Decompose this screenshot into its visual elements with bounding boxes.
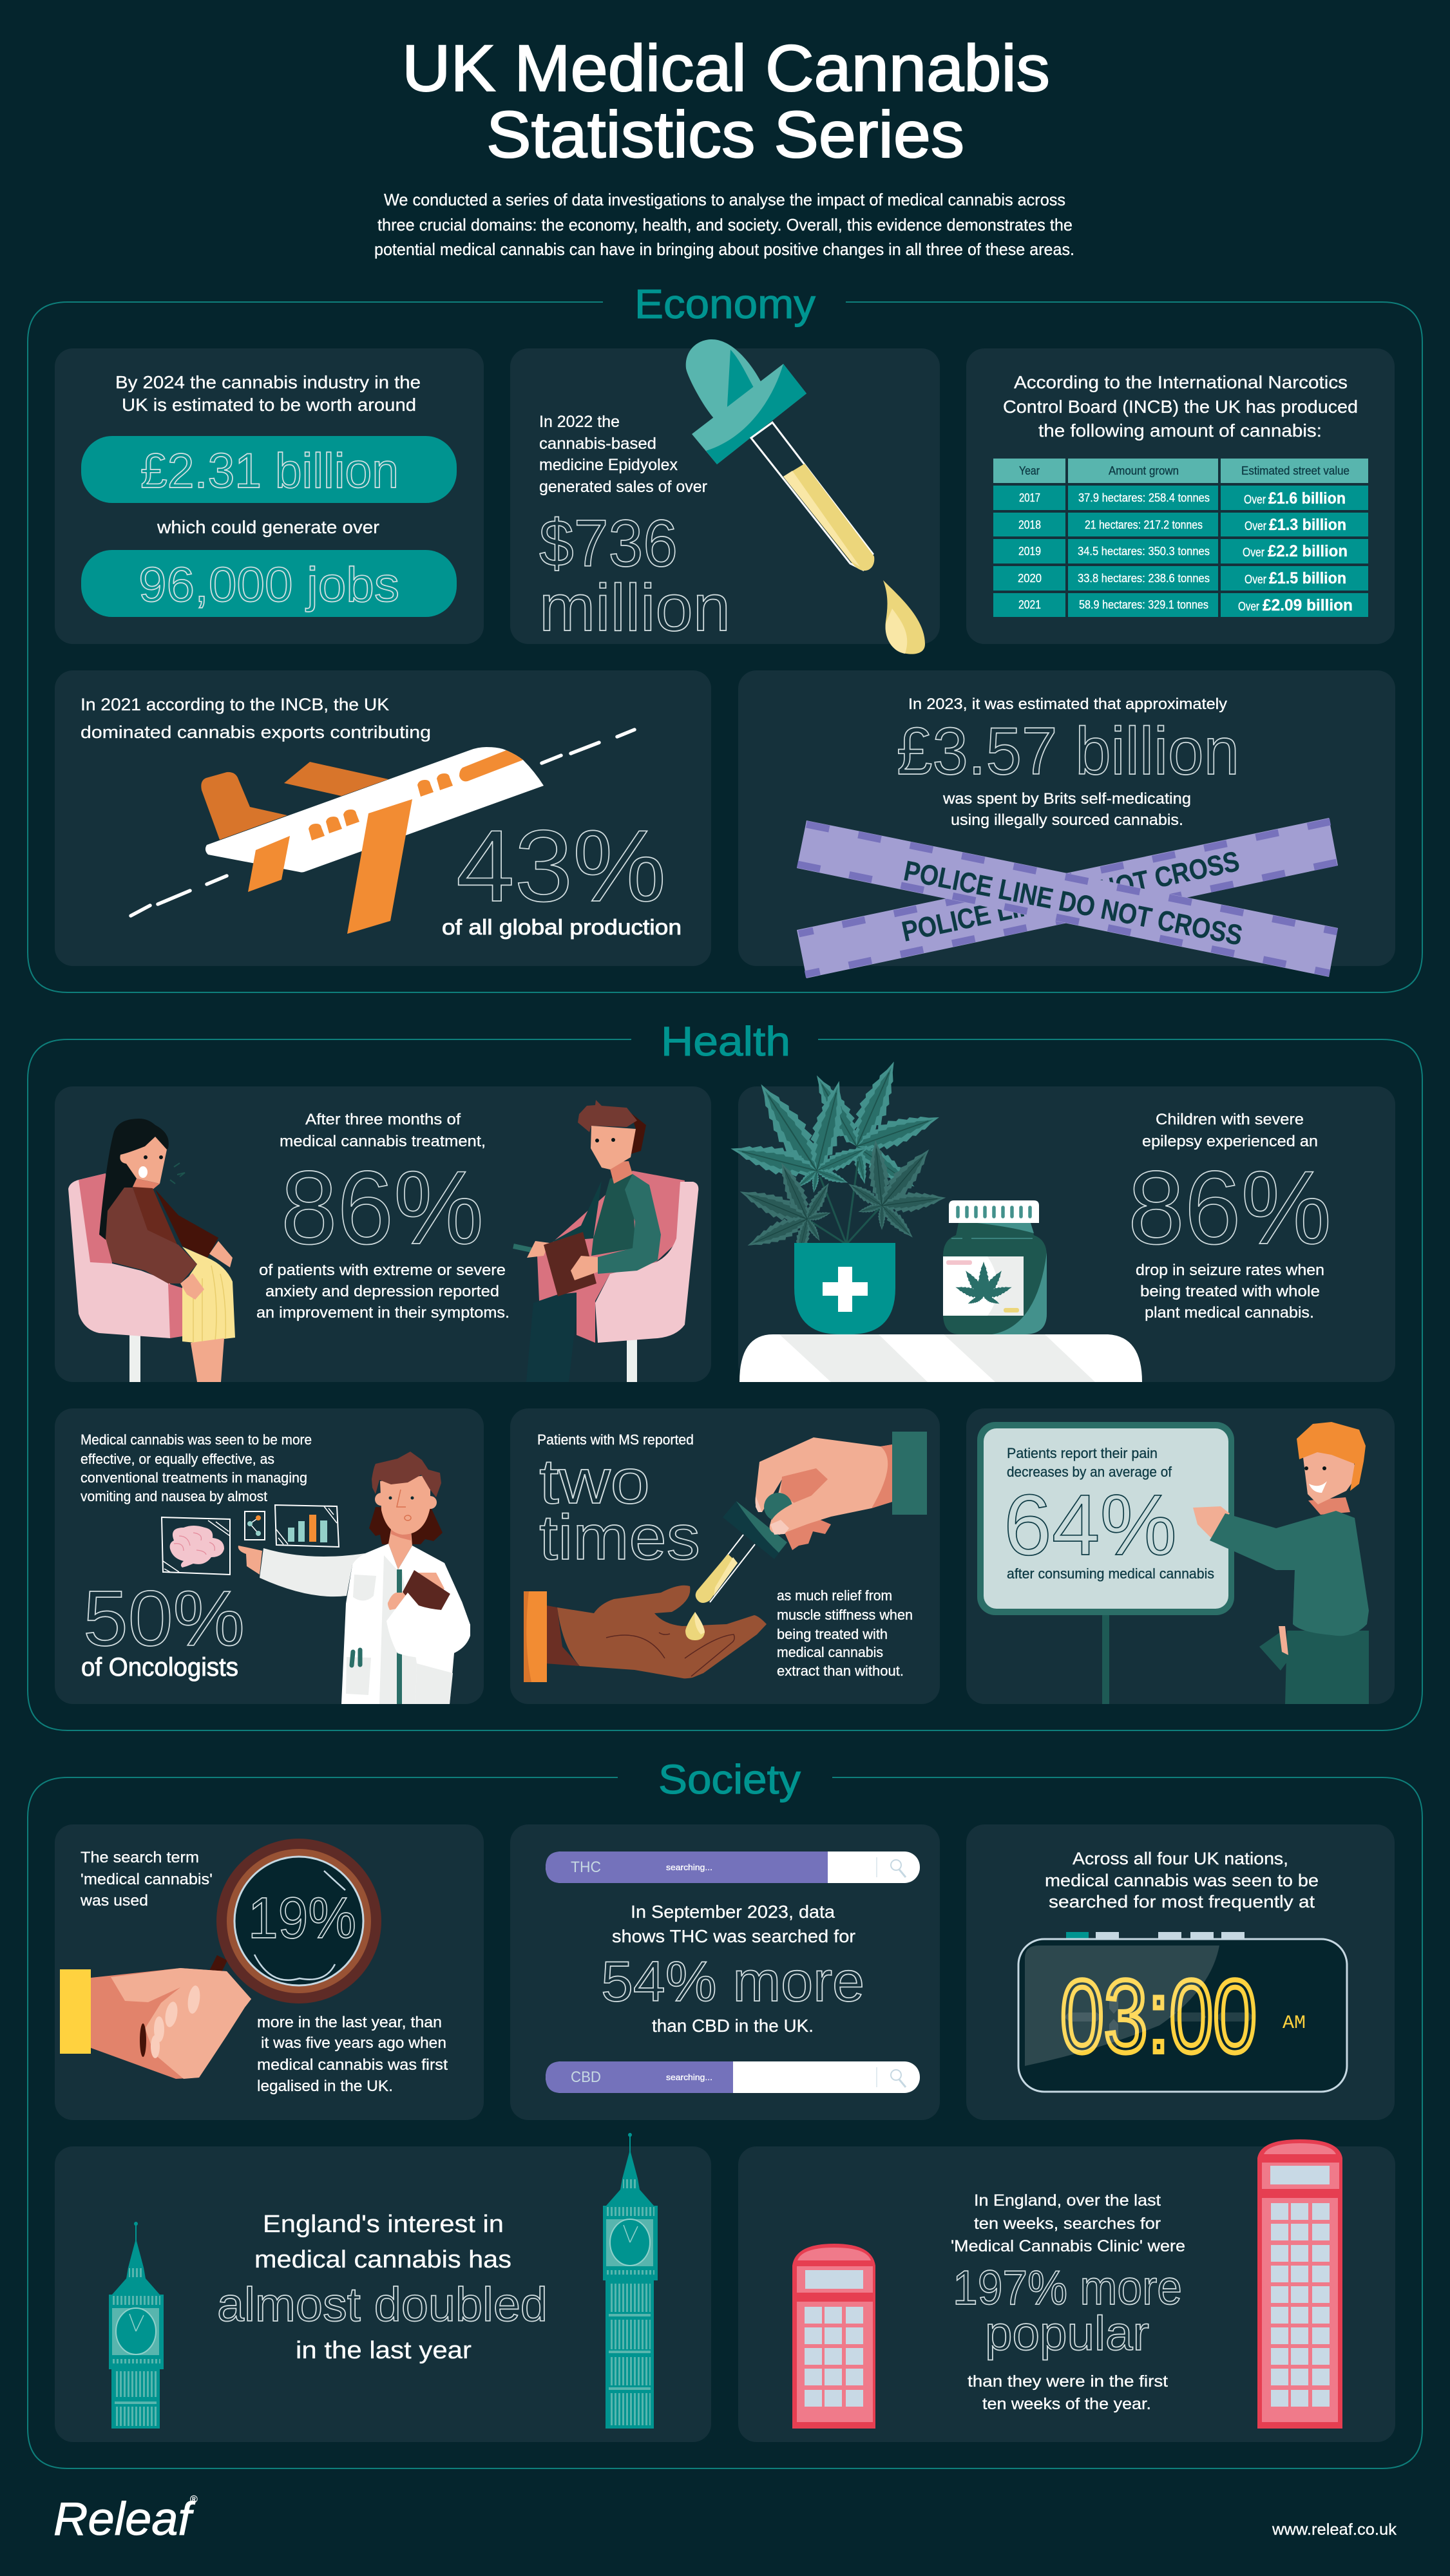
panel: epidyolex: $736 [539, 506, 678, 580]
police tape: POLICE LINE DO NOT CROSS [901, 855, 1245, 952]
panel: search term: legalised in the UK. [257, 2078, 393, 2095]
panel: multiple sclerosis: times [539, 1502, 700, 1573]
table with jar and plant [727, 1056, 1142, 1382]
icon: small Big Ben [109, 2222, 164, 2429]
section frame: society [28, 1777, 1422, 2468]
illustration: hand with dropper [696, 1432, 927, 1603]
panel: THC vs CBD [510, 1824, 940, 2120]
board [977, 1422, 1234, 1704]
panel: search term [55, 1824, 484, 2120]
table: 33.8 hectares: 238.6 tonnes [1078, 572, 1210, 585]
search bar: CBD: searching... [666, 2072, 712, 2082]
icon: dropper [686, 339, 925, 654]
title [402, 32, 1050, 171]
panel: self-medicating: £3.57 billion [897, 714, 1239, 789]
police tape: POLICE LINE DO NOT CROSS [899, 846, 1242, 948]
panel: epilepsy: drop in seizure rates when [1136, 1262, 1324, 1279]
panel: search term: it was five years ago when [261, 2034, 446, 2052]
table: 2018 [1018, 518, 1041, 531]
table: Year [1019, 464, 1040, 477]
icon: large phone box [1257, 2139, 1342, 2429]
panel: exports: 43% [456, 810, 666, 923]
panel: oncologists: 50% [83, 1575, 245, 1662]
panel: search term: was used [80, 1892, 148, 1909]
panel: multiple sclerosis: medical cannabis [777, 1644, 883, 1660]
panel: THC vs CBD: than CBD in the UK. [652, 2016, 814, 2036]
heading: economy: Economy [634, 281, 816, 327]
logo: Releaf [53, 2494, 196, 2545]
table: Over [1244, 493, 1266, 507]
search bar: CBD: CBD [571, 2069, 601, 2086]
search bar: THC: searching... [666, 1862, 712, 1872]
panel: self-medicating: using illegally sourced cannabis. [951, 811, 1183, 829]
icon: large Big Ben [603, 2133, 658, 2429]
illustration: cupped hand [524, 1586, 767, 1682]
board: decreases by an average of [1007, 1464, 1172, 1480]
panel: epidyolex: million [539, 571, 730, 645]
panel: epidyolex: cannabis-based [539, 435, 656, 453]
intro text: three crucial domains: the economy, health, and society. Overall, this evidence demonstrates the [377, 215, 1073, 234]
panel: epidyolex: medicine Epidyolex [539, 456, 678, 474]
table: Over [1245, 520, 1267, 533]
panel: multiple sclerosis: extract than without. [777, 1663, 904, 1679]
panel: self-medicating: In 2023, it was estimated that approximately [908, 696, 1227, 713]
floating brain and chart panels [162, 1505, 339, 1575]
panel: oncologists: Medical cannabis was seen to be more [81, 1432, 312, 1448]
search bar: THC [546, 1852, 920, 1883]
panel: multiple sclerosis: as much relief from [777, 1587, 892, 1604]
panel: industry worth: which could generate over [157, 517, 379, 537]
table: £1.5 billion [1269, 569, 1346, 587]
digital clock: 03:00 [1060, 1958, 1257, 2074]
panel: multiple sclerosis [510, 1408, 940, 1704]
panel: clinic searches: than they were in the first [968, 2372, 1168, 2391]
panel: industry worth [55, 348, 484, 644]
icon: plant [727, 1056, 947, 1262]
pill: 2.31 billion [81, 436, 457, 503]
panel: self-medicating: was spent by Brits self-medicating [942, 790, 1191, 808]
table: Over [1243, 546, 1265, 560]
illustration: oncologist [238, 1452, 470, 1704]
search bar: THC: THC [571, 1859, 601, 1876]
panel: cannabis production table: the following amount of cannabis: [1038, 421, 1322, 440]
panel: searched at 3am: medical cannabis was seen to be [1045, 1871, 1319, 1890]
panel: exports: of all global production [442, 915, 682, 939]
panel: search term: more in the last year, than [257, 2014, 442, 2031]
table [993, 459, 1368, 617]
panel: England interest: almost doubled [217, 2278, 548, 2331]
table: 58.9 hectares: 329.1 tonnes [1079, 598, 1208, 611]
panel: THC vs CBD: shows THC was searched for [612, 1926, 855, 1946]
panel: England interest: medical cannabis has [254, 2246, 511, 2273]
panel: multiple sclerosis: muscle stiffness when [777, 1607, 913, 1623]
panel: clinic searches: popular [985, 2306, 1149, 2360]
pill: jobs [81, 550, 457, 617]
panel: searched at 3am: searched for most frequently at [1049, 1892, 1315, 1911]
pill: 2.31 billion: £2.31 billion [140, 444, 399, 498]
panel: epilepsy: being treated with whole [1140, 1283, 1320, 1300]
table: Estimated street value [1241, 464, 1350, 477]
intro text: We conducted a series of data investigations to analyse the impact of medical cannabis across [384, 190, 1065, 209]
panel: anxiety and depression: medical cannabis treatment, [280, 1133, 486, 1150]
board: after consuming medical cannabis [1007, 1566, 1214, 1582]
digital clock [1018, 1932, 1347, 2092]
panel: oncologists [55, 1408, 484, 1704]
section frame: economy [28, 302, 1422, 992]
digital clock: AM [1283, 2012, 1306, 2034]
panel: search term: The search term [81, 1849, 199, 1866]
panel: oncologists: conventional treatments in managing [81, 1470, 307, 1486]
table: Over [1245, 573, 1267, 587]
panel: clinic searches: 'Medical Cannabis Clinic' were [951, 2237, 1185, 2255]
table: 2021 [1018, 598, 1041, 611]
table: £2.09 billion [1263, 596, 1353, 614]
table: £1.3 billion [1269, 516, 1346, 534]
panel: anxiety and depression: of patients with extreme or severe [259, 1262, 506, 1279]
panel: epilepsy: 86% [1128, 1150, 1331, 1266]
panel: multiple sclerosis: being treated with [777, 1626, 888, 1642]
pill: jobs: 96,000 jobs [138, 558, 399, 612]
intro text: potential medical cannabis can have in bringing about positive changes in all three of these areas. [374, 240, 1074, 259]
board: 64% [1004, 1477, 1177, 1573]
panel: oncologists: effective, or equally effective, as [81, 1451, 274, 1467]
panel: anxiety and depression [55, 1086, 711, 1382]
panel: searched at 3am [966, 1824, 1395, 2120]
panel: England interest: England's interest in [263, 2211, 504, 2238]
panel: clinic searches: ten weeks, searches for [974, 2215, 1161, 2233]
panel: search term: medical cannabis was first [257, 2056, 448, 2074]
police tape [797, 818, 1338, 978]
panel: self-medicating [738, 670, 1395, 978]
board: Patients report their pain [1007, 1445, 1158, 1461]
logo: ® [190, 2494, 198, 2505]
panel: industry worth: UK is estimated to be worth around [122, 395, 416, 415]
icon: magnifier and hand: 19% [248, 1886, 356, 1951]
panel: searched at 3am: Across all four UK nations, [1073, 1849, 1288, 1868]
panel: oncologists: of Oncologists [81, 1653, 238, 1681]
search bar: CBD [546, 2061, 920, 2093]
icon: magnifier and hand [60, 1839, 381, 2079]
panel: clinic searches: In England, over the last [974, 2192, 1161, 2210]
panel: cannabis production table [966, 348, 1395, 644]
panel: THC vs CBD: In September 2023, data [631, 1902, 835, 1922]
panel: multiple sclerosis: two [539, 1446, 650, 1517]
title: Statistics Series [486, 98, 964, 171]
panel: anxiety and depression: 86% [281, 1150, 484, 1266]
table: 21 hectares: 217.2 tonnes [1085, 518, 1203, 531]
panel: industry worth: By 2024 the cannabis industry in the [115, 372, 421, 392]
panel: clinic searches: ten weeks of the year. [982, 2395, 1151, 2413]
panel: cannabis production table: Control Board (INCB) the UK has produced [1003, 397, 1358, 417]
icon: aeroplane [131, 730, 634, 934]
icon: medicine jar [943, 1200, 1047, 1334]
panel: exports: dominated cannabis exports contributing [81, 723, 431, 742]
panel: epilepsy [727, 1056, 1395, 1382]
table: 2017 [1019, 491, 1040, 504]
section frame: health [28, 1039, 1422, 1730]
panel: epilepsy: epilepsy experienced an [1142, 1133, 1318, 1150]
panel: clinic searches [738, 2139, 1395, 2442]
panel: exports [55, 670, 711, 966]
panel: pain board [966, 1408, 1395, 1704]
heading: health: Health [661, 1018, 790, 1065]
panel: oncologists: vomiting and nausea by almost [81, 1488, 267, 1504]
table: Amount grown [1109, 464, 1179, 477]
panel: multiple sclerosis: Patients with MS reported [537, 1432, 694, 1448]
icon: small phone box [792, 2244, 875, 2429]
table: 2019 [1018, 545, 1041, 558]
panel: epidyolex: generated sales of over [539, 478, 707, 496]
table: £1.6 billion [1268, 489, 1346, 507]
icon: pot [794, 1243, 895, 1334]
intro text [374, 190, 1074, 259]
table: 2020 [1018, 572, 1042, 585]
panel: THC vs CBD: 54% more [601, 1949, 864, 2013]
panel: epidyolex: In 2022 the [539, 413, 620, 431]
heading: society: Society [658, 1756, 801, 1803]
table: 34.5 hectares: 350.3 tonnes [1078, 545, 1210, 558]
panel: England interest [55, 2133, 711, 2442]
panel: epilepsy: Children with severe [1156, 1111, 1304, 1128]
table: 37.9 hectares: 258.4 tonnes [1078, 491, 1210, 504]
illustration: doctor in chair [513, 1100, 698, 1382]
panel: anxiety and depression: an improvement in their symptoms. [256, 1304, 510, 1321]
illustration: man pointing [1193, 1422, 1369, 1704]
illustration: patient in chair [68, 1119, 235, 1382]
table: Over [1238, 600, 1260, 614]
panel: clinic searches: 197% more [953, 2260, 1182, 2315]
panel: exports: In 2021 according to the INCB, the UK [81, 695, 389, 714]
website: www.releaf.co.uk [1272, 2521, 1397, 2539]
panel: anxiety and depression: After three months of [305, 1111, 461, 1128]
panel: cannabis production table: According to the International Narcotics [1014, 372, 1348, 392]
panel: England interest: in the last year [296, 2337, 472, 2364]
panel: epidyolex [510, 339, 940, 654]
title: UK Medical Cannabis [402, 32, 1050, 105]
panel: epilepsy: plant medical cannabis. [1145, 1304, 1314, 1321]
panel: search term: 'medical cannabis' [81, 1871, 213, 1888]
panel: anxiety and depression: anxiety and depression reported [265, 1283, 499, 1300]
table: £2.2 billion [1268, 542, 1348, 560]
